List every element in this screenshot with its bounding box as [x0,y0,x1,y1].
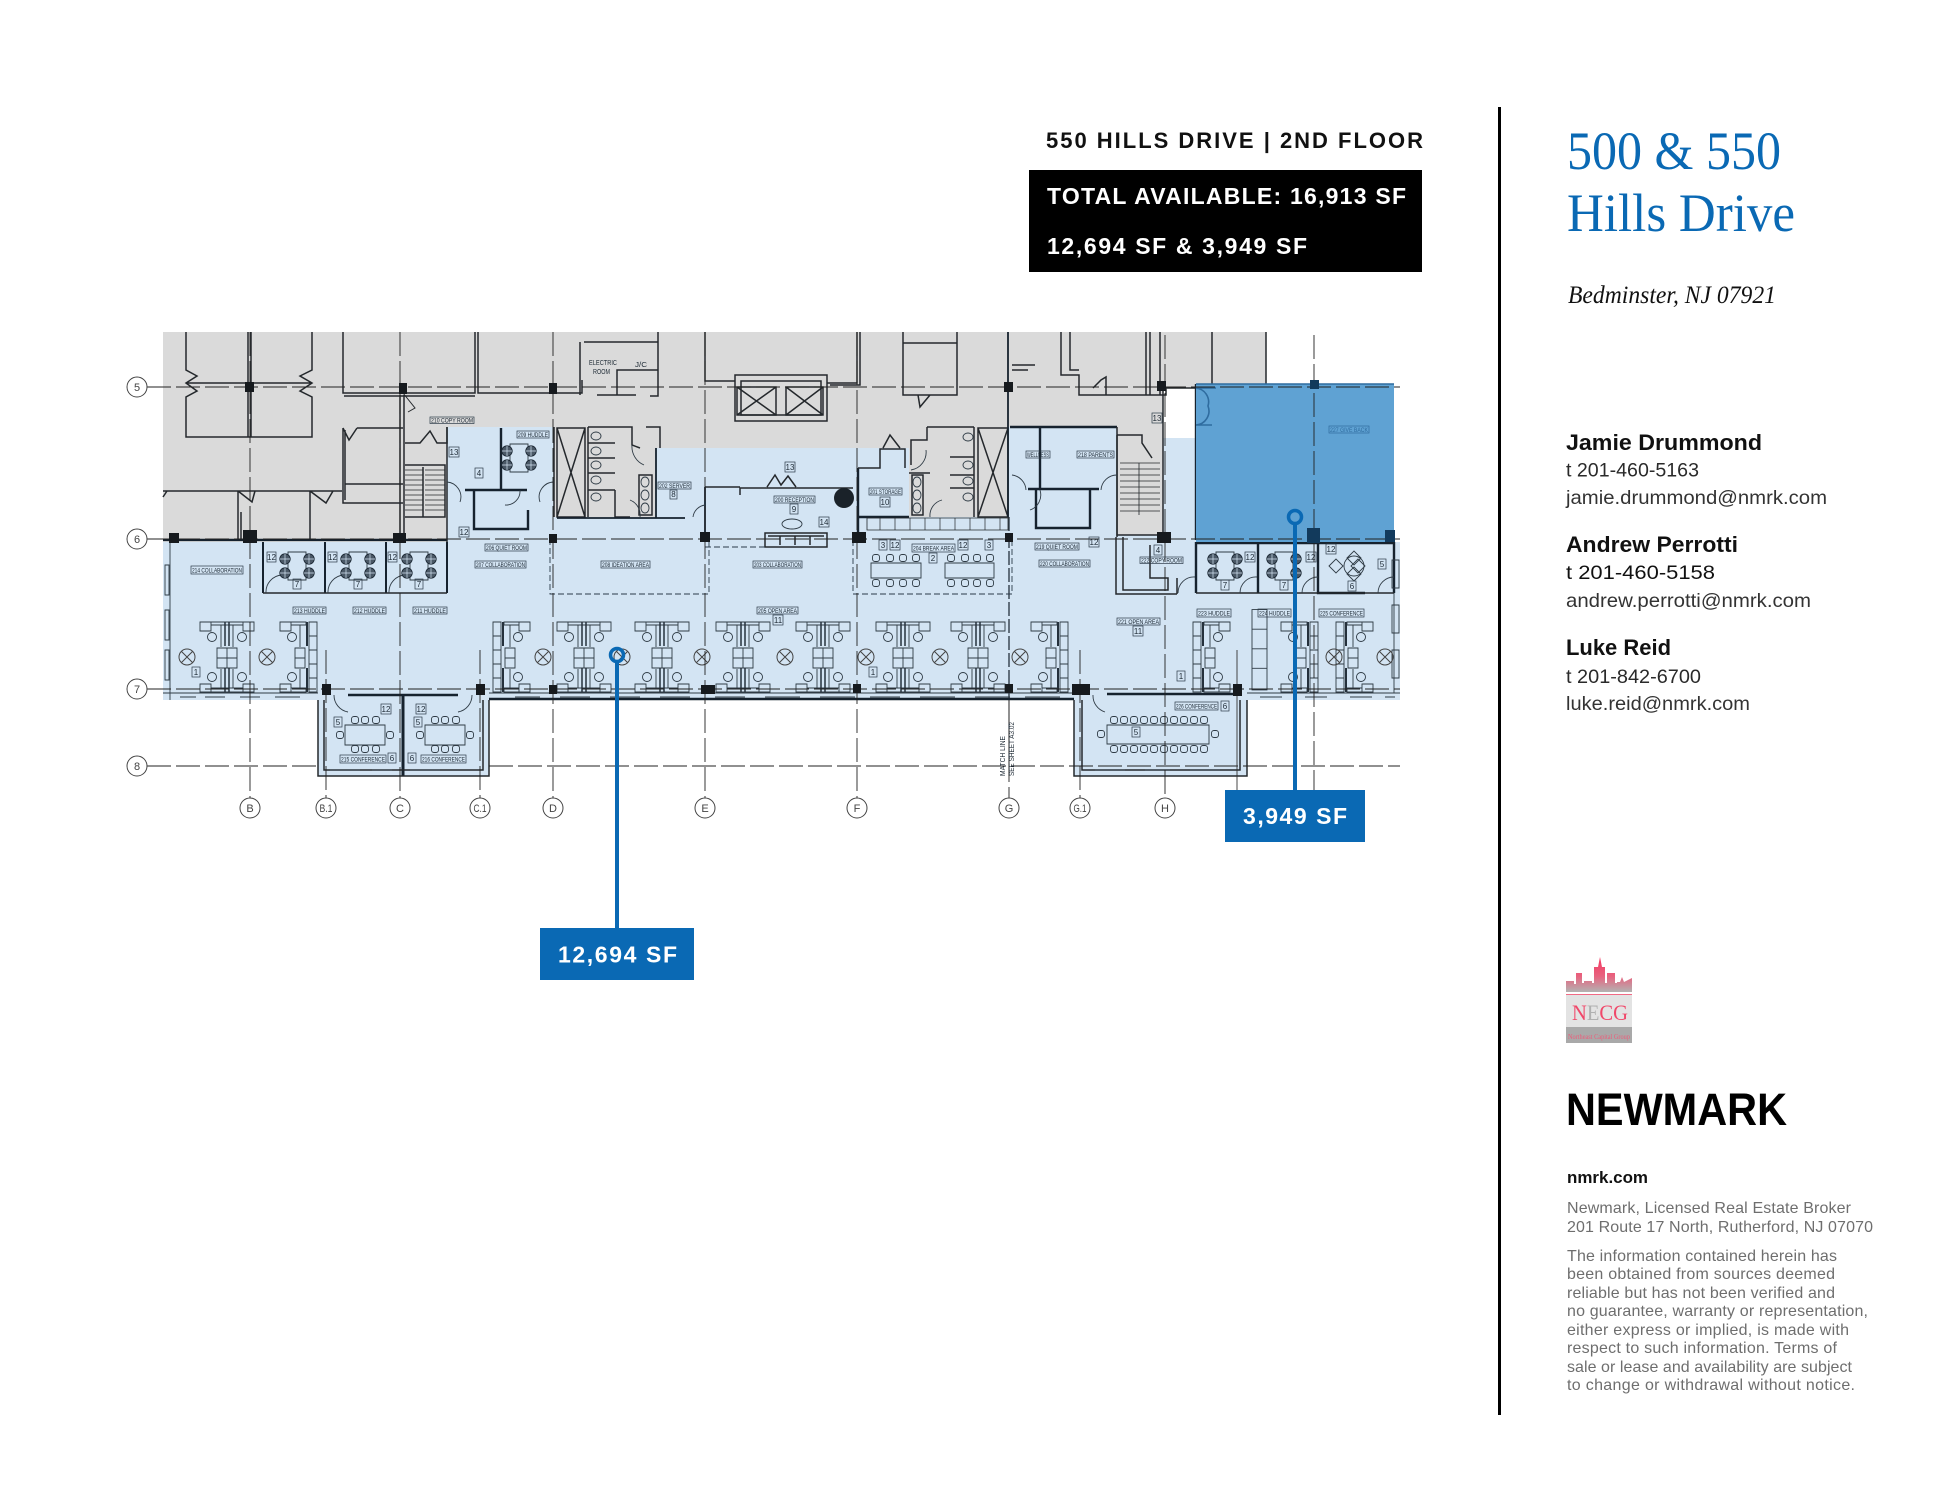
room labels: 226 CONFERENCE [1176,704,1217,710]
contact: Andrew Perrotti: andrew.perrotti@nmrk.com [1566,590,1811,612]
keynote tags: 13 [1153,414,1162,423]
contact: Andrew Perrotti [1566,532,1811,612]
keynote tags: 14 [820,518,829,527]
address: Bedminster, NJ 07921 [1568,282,1776,309]
keynote tags: 3 [987,541,992,550]
keynote tags: 6 [1350,582,1355,591]
room labels: 215 CONFERENCE [341,758,385,764]
keynote tags: 12 [382,705,391,714]
room labels: 206 QUIET ROOM [486,546,527,552]
contact: Jamie Drummond: Jamie Drummond [1566,430,1762,455]
room labels: 202 SERVER [659,484,691,490]
room labels: ROOM [593,369,610,376]
disclaimer: reliable but has not been verified and [1567,1285,1835,1302]
room labels: SEE SHEET A3.02 [1009,722,1016,776]
keynote tags: 12 [460,528,469,537]
room labels: 204 BREAK AREA [913,546,954,552]
disclaimer: to change or withdrawal without notice. [1567,1377,1855,1394]
keynote tags: 12 [1307,553,1316,562]
keynote tags: 1 [194,668,199,677]
column grid lines [147,332,1400,798]
room labels: 210 COPY ROOM [431,418,473,424]
contact: Jamie Drummond: jamie.drummond@nmrk.com [1565,487,1827,509]
disclaimer: sale or lease and availability are subject [1567,1359,1853,1376]
row and column bubbles [127,377,1175,818]
room labels: 218 PARENTS [1078,453,1113,459]
dark blue give-back area: 3,949 SF [1196,384,1394,542]
keynote tags: 13 [786,463,795,472]
panel: total available [1029,170,1422,272]
room labels: J/C [635,362,647,369]
contact: Luke Reid [1566,635,1750,715]
keynote tags: 9 [792,505,797,514]
keynote tags: 5 [416,718,421,727]
keynote tags: 11 [1134,627,1143,636]
row and column bubbles: B.1 [320,803,332,815]
keynote tags: 7 [295,580,300,589]
row and column bubbles: D [549,803,557,815]
room labels: 209 HUDDLE [518,433,548,439]
dashed area outlines [550,539,1012,594]
row and column bubbles: F [854,803,861,815]
disclaimer [1567,1248,1868,1394]
panel: total available: TOTAL AVAILABLE: 16,913 SF [1047,183,1406,209]
row and column bubbles: C.1 [474,803,486,815]
room labels: 220 COLLABORATION [1040,562,1089,568]
room labels: 207 COLLABORATION [476,563,525,569]
keynote tags: 12 [328,553,337,562]
keynote tags: 7 [417,580,422,589]
panel: total available: 12,694 SF & 3,949 SF [1047,233,1307,259]
logo: NEWMARK: NEWMARK [1566,1084,1787,1135]
row and column bubbles: 8 [134,761,140,773]
room labels: 201 STORAGE [870,490,901,496]
disclaimer: been obtained from sources deemed [1567,1266,1835,1283]
callout: 12,694 SF [540,648,694,980]
keynote tags: 6 [410,754,415,763]
contact: Luke Reid: Luke Reid [1566,635,1671,660]
light blue available suite: 12,694 SF [163,427,1400,776]
room labels: 213 HUDDLE [294,609,325,615]
suite interior walls [163,332,1394,776]
keynote tags: 12 [417,705,426,714]
left and right window walls [163,542,1400,770]
keynote tags: 12 [388,553,397,562]
website: nmrk.com [1567,1168,1648,1187]
room labels: 211 HUDDLE [414,609,446,615]
keynote tags: 2 [931,554,936,563]
logo: NECG: NECG [1572,1000,1628,1025]
row and column bubbles: B [246,803,254,815]
base building walls [163,332,1266,540]
row and column bubbles: G.1 [1074,803,1086,815]
callout: 3,949 SF: 3,949 SF [1243,803,1347,829]
row and column bubbles: C [396,803,404,815]
keynote tags: 6 [390,754,395,763]
room labels: 205 OPEN AREA [758,609,797,615]
keynote tags: 3 [881,541,886,550]
keynote tags: 5 [1380,560,1385,569]
keynote tags: 12 [1090,538,1099,547]
room labels: 203 COLLABORATION [754,563,801,569]
keynote tags: 1 [871,668,876,677]
callout: 12,694 SF: 12,694 SF [558,942,677,968]
keynote tags: 5 [336,718,341,727]
row and column bubbles: 5 [134,382,140,394]
room labels: 224 HUDDLE [1259,612,1290,618]
floor plan [127,332,1400,818]
keynote tags: 4 [1156,546,1161,555]
structural columns [169,380,1395,696]
broker address: Newmark, Licensed Real Estate Broker [1567,1200,1852,1217]
logo: NECG: Northeast Capital Group [1568,1033,1630,1041]
callout: 3,949 SF [1225,510,1365,842]
keynote tags: 8 [671,490,676,499]
disclaimer: no guarantee, warranty or representation, [1567,1303,1868,1320]
room labels: MATCH LINE [1000,736,1007,776]
room labels: 222 COPY ROOM [1141,558,1182,564]
keynote tags: 12 [1246,553,1255,562]
keynote tags: 12 [891,541,900,550]
contact: Jamie Drummond [1565,430,1827,509]
logo: NECG [1566,957,1632,1043]
row and column bubbles: G [1005,803,1013,815]
sidebar divider [1498,107,1501,1415]
disclaimer: either express or implied, is made with [1567,1322,1849,1339]
keynote tags: 7 [356,580,361,589]
contact: Luke Reid: t 201-842-6700 [1566,666,1701,688]
keynote tags: 5 [1134,728,1139,737]
huddle and conference furniture [280,444,1365,752]
disclaimer: respect to such information. Terms of [1567,1340,1838,1357]
room labels: 214 COLLABORATION [192,568,242,574]
broker address [1567,1200,1873,1236]
room labels: 200 RECEPTION [775,498,814,504]
contact: Andrew Perrotti: t 201-460-5158 [1566,562,1715,584]
header: building and floor: 550 HILLS DRIVE | 2ND FLOOR [1046,128,1423,153]
room labels: ELECTRIC [589,360,617,367]
property title: Hills Drive [1567,183,1795,243]
row and column bubbles: 6 [134,534,140,546]
row and column bubbles: E [701,803,709,815]
keynote tags: 12 [959,541,968,550]
room labels: 221 OPEN AREA [1118,620,1159,626]
keynote tags: 12 [1327,545,1336,554]
contact: Andrew Perrotti: Andrew Perrotti [1566,532,1738,557]
room labels: 216 CONFERENCE [422,758,465,764]
row and column bubbles: H [1161,803,1169,815]
row and column bubbles: 7 [134,684,140,696]
keynote tags: 13 [450,448,459,457]
keynote tags: 7 [1223,581,1228,590]
room labels: 223 HUDDLE [1198,612,1230,618]
white notch [1163,388,1196,438]
keynote tags: 6 [1223,702,1228,711]
room labels: 227 GIVE BACK [1330,428,1368,434]
property title: 500 & 550 [1567,121,1781,181]
gray base-building area [163,332,1266,540]
keynote tags: 7 [1282,581,1287,590]
contact: Luke Reid: luke.reid@nmrk.com [1566,693,1750,715]
broker address: 201 Route 17 North, Rutherford, NJ 07070 [1567,1219,1873,1236]
keynote tags [192,413,1386,763]
keynote tags: 4 [477,469,482,478]
keynote tags: 1 [1179,672,1184,681]
keynote tags: 11 [774,616,783,625]
room labels: 208 IDEATION AREA [602,563,649,569]
keynote tags: 10 [881,498,890,507]
room labels: 225 CONFERENCE [1320,612,1363,618]
contact: Jamie Drummond: t 201-460-5163 [1566,460,1699,482]
room labels [191,360,1369,776]
keynote tags: 12 [267,553,276,562]
room labels: 212 HUDDLE [354,609,385,615]
workstation clusters [179,610,1393,692]
room labels: WELLNESS [1027,453,1049,459]
room labels: 219 QUIET ROOM [1036,545,1078,551]
restroom fixtures [591,432,973,517]
property title [1567,121,1795,243]
disclaimer: The information contained herein has [1567,1248,1837,1265]
